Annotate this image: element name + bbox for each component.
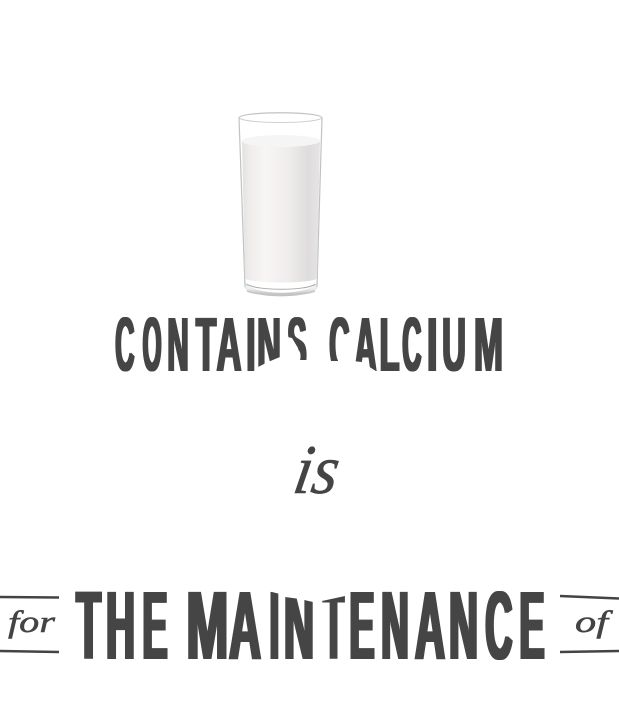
heading: the maintenance: M [186,571,228,680]
heading: contains calcium: C [115,302,134,388]
heading: the maintenance: T [323,571,344,680]
heading: the maintenance [76,571,545,680]
heading: the maintenance: N [381,571,409,680]
heading: contains calcium: N [257,302,281,388]
heading: contains calcium: T [196,302,216,388]
heading: the maintenance: H [106,571,135,680]
heading: the maintenance: I [270,571,279,680]
icon: glass of milk [239,113,322,296]
script word: is: is [288,431,346,509]
right banner: of: of [575,604,614,639]
torn mask over the top of the heading [268,588,350,602]
text: M [474,302,503,388]
heading: contains calcium: C [402,302,422,388]
heading: the maintenance: N [284,571,314,680]
left banner: for [0,597,59,652]
heading: contains calcium: U [442,302,466,388]
heading: contains calcium: N [167,302,189,388]
heading: contains calcium [115,302,503,388]
heading: contains calcium: A [216,302,242,388]
heading: the maintenance: A [415,571,445,680]
right banner: of [560,596,619,652]
left banner: for: for [8,604,56,639]
heading: contains calcium: C [329,302,350,388]
heading: contains calcium: I [427,302,438,388]
heading: the maintenance: T [76,571,101,680]
heading: the maintenance: E [142,571,168,680]
torn mask over the middle of the heading [256,336,379,376]
heading: the maintenance: A [229,571,261,680]
heading: contains calcium: A [354,302,376,388]
text: E [520,571,544,680]
heading: contains calcium: L [380,302,400,388]
heading: contains calcium: S [287,302,307,388]
heading: the maintenance: N [449,571,478,680]
heading: the maintenance: E [350,571,374,680]
heading: the maintenance: C [485,571,512,680]
heading: contains calcium: I [246,302,256,388]
heading: contains calcium: O [143,302,162,388]
